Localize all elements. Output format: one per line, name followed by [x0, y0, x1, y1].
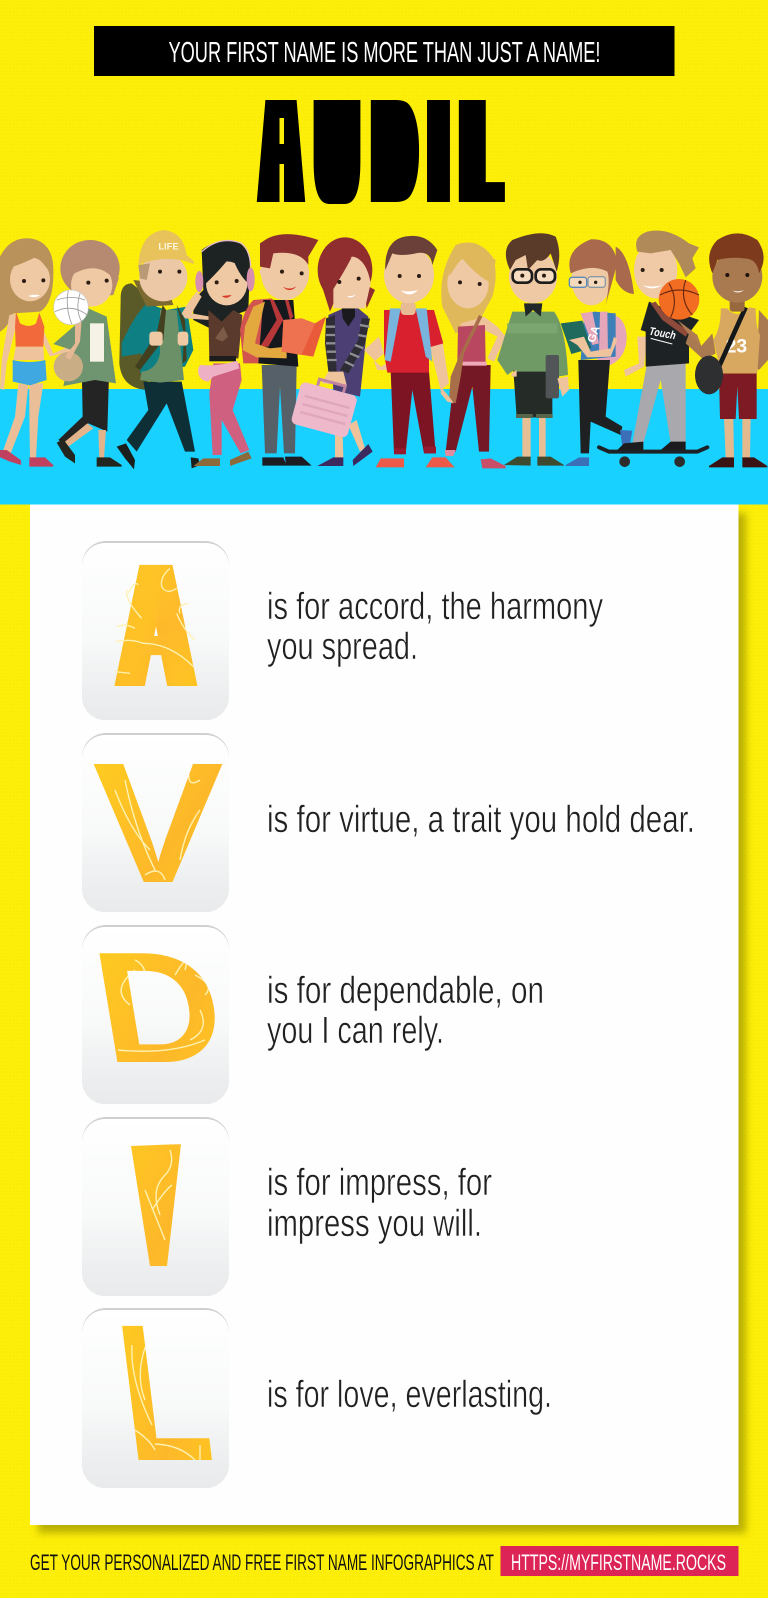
person 1: girl in orange top: [0, 238, 82, 467]
text for I: is for impress, for: [267, 1162, 492, 1204]
person 12: boy in tank top with bag: 23: [726, 337, 747, 358]
text for I: impress you will.: [267, 1203, 482, 1245]
tile D: [82, 920, 236, 1104]
title: AUDIL: [269, 72, 498, 236]
tile I: [82, 1106, 229, 1304]
floor band: [0, 389, 768, 504]
text for A: is for accord, the harmony: [267, 586, 603, 628]
person 10: girl with ponytail and tablet: GA: [586, 324, 603, 344]
person 9: boy with glasses: [497, 233, 569, 466]
person 7: boy in red shirt: [364, 236, 455, 467]
title: AUDIL: D: [374, 72, 414, 236]
person 8: blonde girl: [441, 243, 506, 468]
text for I: [267, 1162, 492, 1245]
person 12: boy in tank top with bag: [686, 233, 768, 467]
text for A: [267, 586, 603, 668]
person 6: girl with pink bag: [290, 237, 375, 466]
text for D: [267, 970, 544, 1052]
text for D: is for dependable, on: [267, 970, 544, 1012]
person 11: skateboarder with basketball: Touch: [648, 326, 677, 342]
person 4: girl with headphones: [182, 241, 255, 466]
text for D: you I can rely.: [267, 1010, 444, 1052]
title: AUDIL: A: [269, 72, 294, 235]
footer call to action: GET YOUR PERSONALIZED AND FREE FIRST NAME INFOGRAPHICS AT: [30, 1550, 494, 1575]
letter I: I: [101, 1106, 213, 1304]
tile L: [82, 1308, 229, 1488]
person 3: hiker with cap: [117, 230, 200, 469]
person 10: girl with ponytail and tablet: [561, 239, 634, 466]
letter L: L: [107, 1284, 222, 1502]
letter V: V: [92, 728, 224, 919]
skateboard: [599, 447, 707, 467]
title: AUDIL: L: [462, 74, 498, 236]
tile A: [82, 527, 229, 724]
title: AUDIL: U: [317, 73, 357, 235]
person 5: boy reading book: [240, 234, 326, 466]
person 2: girl with volleyball: [53, 240, 122, 467]
letter D: D: [82, 920, 236, 1096]
top banner: [94, 26, 674, 76]
group of people, right half: [364, 231, 768, 468]
tile V: [82, 728, 229, 919]
panel shadow: [38, 513, 746, 1533]
text for L: is for love, everlasting.: [267, 1374, 552, 1416]
person 3: hiker with cap: LIFE: [158, 241, 179, 251]
letter I: [131, 1144, 181, 1266]
white content panel: [30, 504, 738, 1525]
person 11: skateboarder with basketball: [599, 231, 707, 467]
group of people, left half: [0, 230, 375, 469]
letter A: A: [120, 527, 192, 724]
text for A: you spread.: [267, 626, 418, 668]
footer: [30, 1546, 738, 1576]
title: AUDIL: I: [428, 74, 449, 236]
